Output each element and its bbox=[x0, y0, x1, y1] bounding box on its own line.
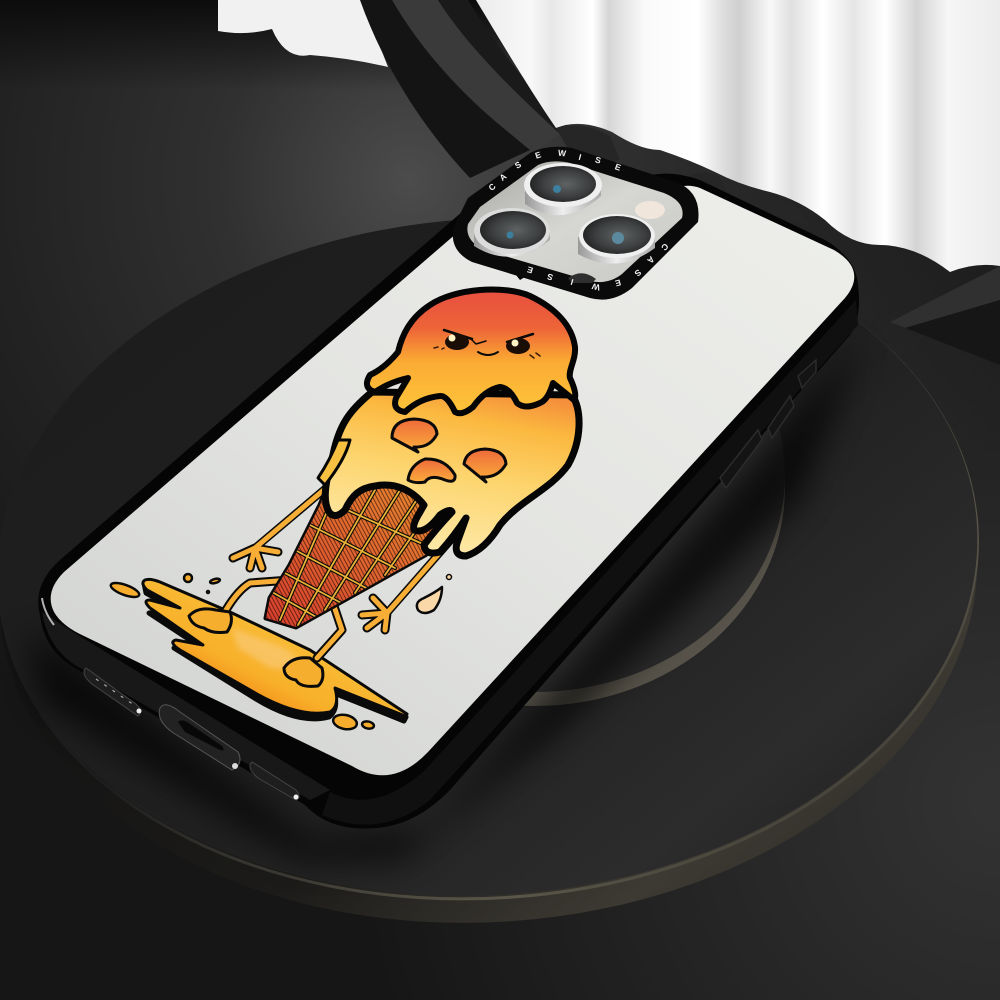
left arm bbox=[255, 472, 345, 548]
lens: right bbox=[578, 214, 655, 264]
right eye bbox=[506, 334, 533, 354]
puddle bbox=[109, 574, 407, 731]
case glossy side bbox=[42, 612, 330, 800]
puddle shadow bbox=[144, 583, 406, 721]
melting drip bbox=[417, 587, 442, 613]
casewise label: lower: W bbox=[590, 281, 601, 293]
right hand bbox=[362, 598, 387, 630]
top scoop bbox=[367, 290, 575, 413]
port: charge bbox=[159, 705, 240, 770]
charge glint bbox=[232, 763, 238, 769]
camera module bbox=[453, 147, 699, 300]
casewise label: lower bbox=[526, 241, 671, 293]
casewise label: lower: S bbox=[546, 271, 554, 283]
casewise label: lower: E bbox=[526, 264, 534, 276]
right wedge stand bbox=[890, 266, 1000, 365]
casewise label: lower: A bbox=[645, 254, 657, 266]
right arm bbox=[387, 533, 457, 613]
camera bumper bbox=[453, 147, 699, 300]
left hand bbox=[233, 548, 278, 568]
camera window bbox=[467, 161, 683, 282]
lens: top bbox=[524, 163, 602, 215]
port: right speaker bbox=[250, 762, 299, 800]
casewise label: lower: I bbox=[569, 277, 575, 287]
casewise label: upper: A bbox=[498, 171, 508, 183]
casewise label: lower: S bbox=[632, 267, 643, 279]
drip droplet bbox=[446, 574, 452, 580]
casewise label: upper: I bbox=[578, 152, 582, 162]
lower scoop bbox=[325, 392, 579, 556]
left drip strip bbox=[318, 440, 350, 485]
left speaker glints bbox=[96, 679, 134, 705]
flash bbox=[635, 201, 665, 219]
left speaker glint end bbox=[136, 708, 142, 714]
right arm fill bbox=[362, 533, 457, 630]
side buttons bbox=[720, 360, 816, 488]
large disc bbox=[0, 186, 1000, 955]
lens: left bbox=[474, 208, 550, 257]
screen back bbox=[51, 186, 854, 775]
top shadow band bbox=[0, 0, 1000, 90]
casewise label: upper: C bbox=[486, 181, 498, 193]
spot: right bbox=[464, 449, 506, 482]
disc top bbox=[0, 186, 1000, 928]
charge opening bbox=[178, 720, 224, 750]
puddle highlight bbox=[232, 628, 315, 672]
disc rim bbox=[0, 201, 1000, 955]
left leg bbox=[226, 580, 290, 610]
spot: middle bbox=[408, 459, 455, 483]
casewise label: lower: C bbox=[659, 241, 671, 253]
small disc top bbox=[285, 258, 785, 692]
casewise label: upper: E bbox=[614, 161, 623, 173]
sensor bbox=[568, 273, 596, 283]
right leg fill bbox=[317, 603, 342, 658]
blush marks bbox=[434, 347, 540, 358]
casewise label: upper bbox=[486, 148, 623, 193]
waffle grid shadow bbox=[272, 489, 422, 626]
spot: upper bbox=[392, 419, 437, 452]
phone shadow bbox=[30, 340, 860, 860]
cone sliver right bbox=[460, 507, 497, 538]
small disc bbox=[285, 258, 785, 706]
right speaker glint bbox=[294, 794, 298, 800]
casewise label: upper: W bbox=[557, 148, 567, 158]
casewise label: lower: E bbox=[614, 277, 622, 289]
puddle body bbox=[143, 579, 407, 716]
case side lower sheen bbox=[322, 300, 858, 825]
mouth bbox=[478, 352, 498, 355]
curtain: left bbox=[218, 0, 388, 67]
disc rim highlight bbox=[0, 187, 1000, 931]
brow crease bbox=[472, 340, 486, 344]
right leg bbox=[317, 603, 342, 658]
left leg fill bbox=[226, 580, 290, 610]
left highlight bbox=[42, 598, 54, 625]
fold bumps behind phone bbox=[556, 125, 810, 226]
port: left speaker bbox=[84, 668, 141, 716]
right foot bbox=[284, 658, 323, 686]
waffle cone bbox=[264, 488, 434, 630]
phone case bbox=[38, 174, 859, 829]
casewise label: upper: S bbox=[513, 159, 523, 171]
left eye bbox=[444, 330, 472, 350]
splash blobs bbox=[109, 574, 375, 731]
arch stand bbox=[360, 0, 570, 178]
small disc rim bbox=[285, 270, 785, 706]
left foot bbox=[189, 609, 231, 632]
ice cream character bbox=[109, 290, 579, 731]
curtain: right bbox=[476, 0, 1000, 272]
casewise label: upper: E bbox=[534, 149, 543, 161]
case body bbox=[38, 174, 859, 829]
left arm fill bbox=[233, 472, 345, 568]
casewise label: upper: S bbox=[594, 154, 602, 166]
